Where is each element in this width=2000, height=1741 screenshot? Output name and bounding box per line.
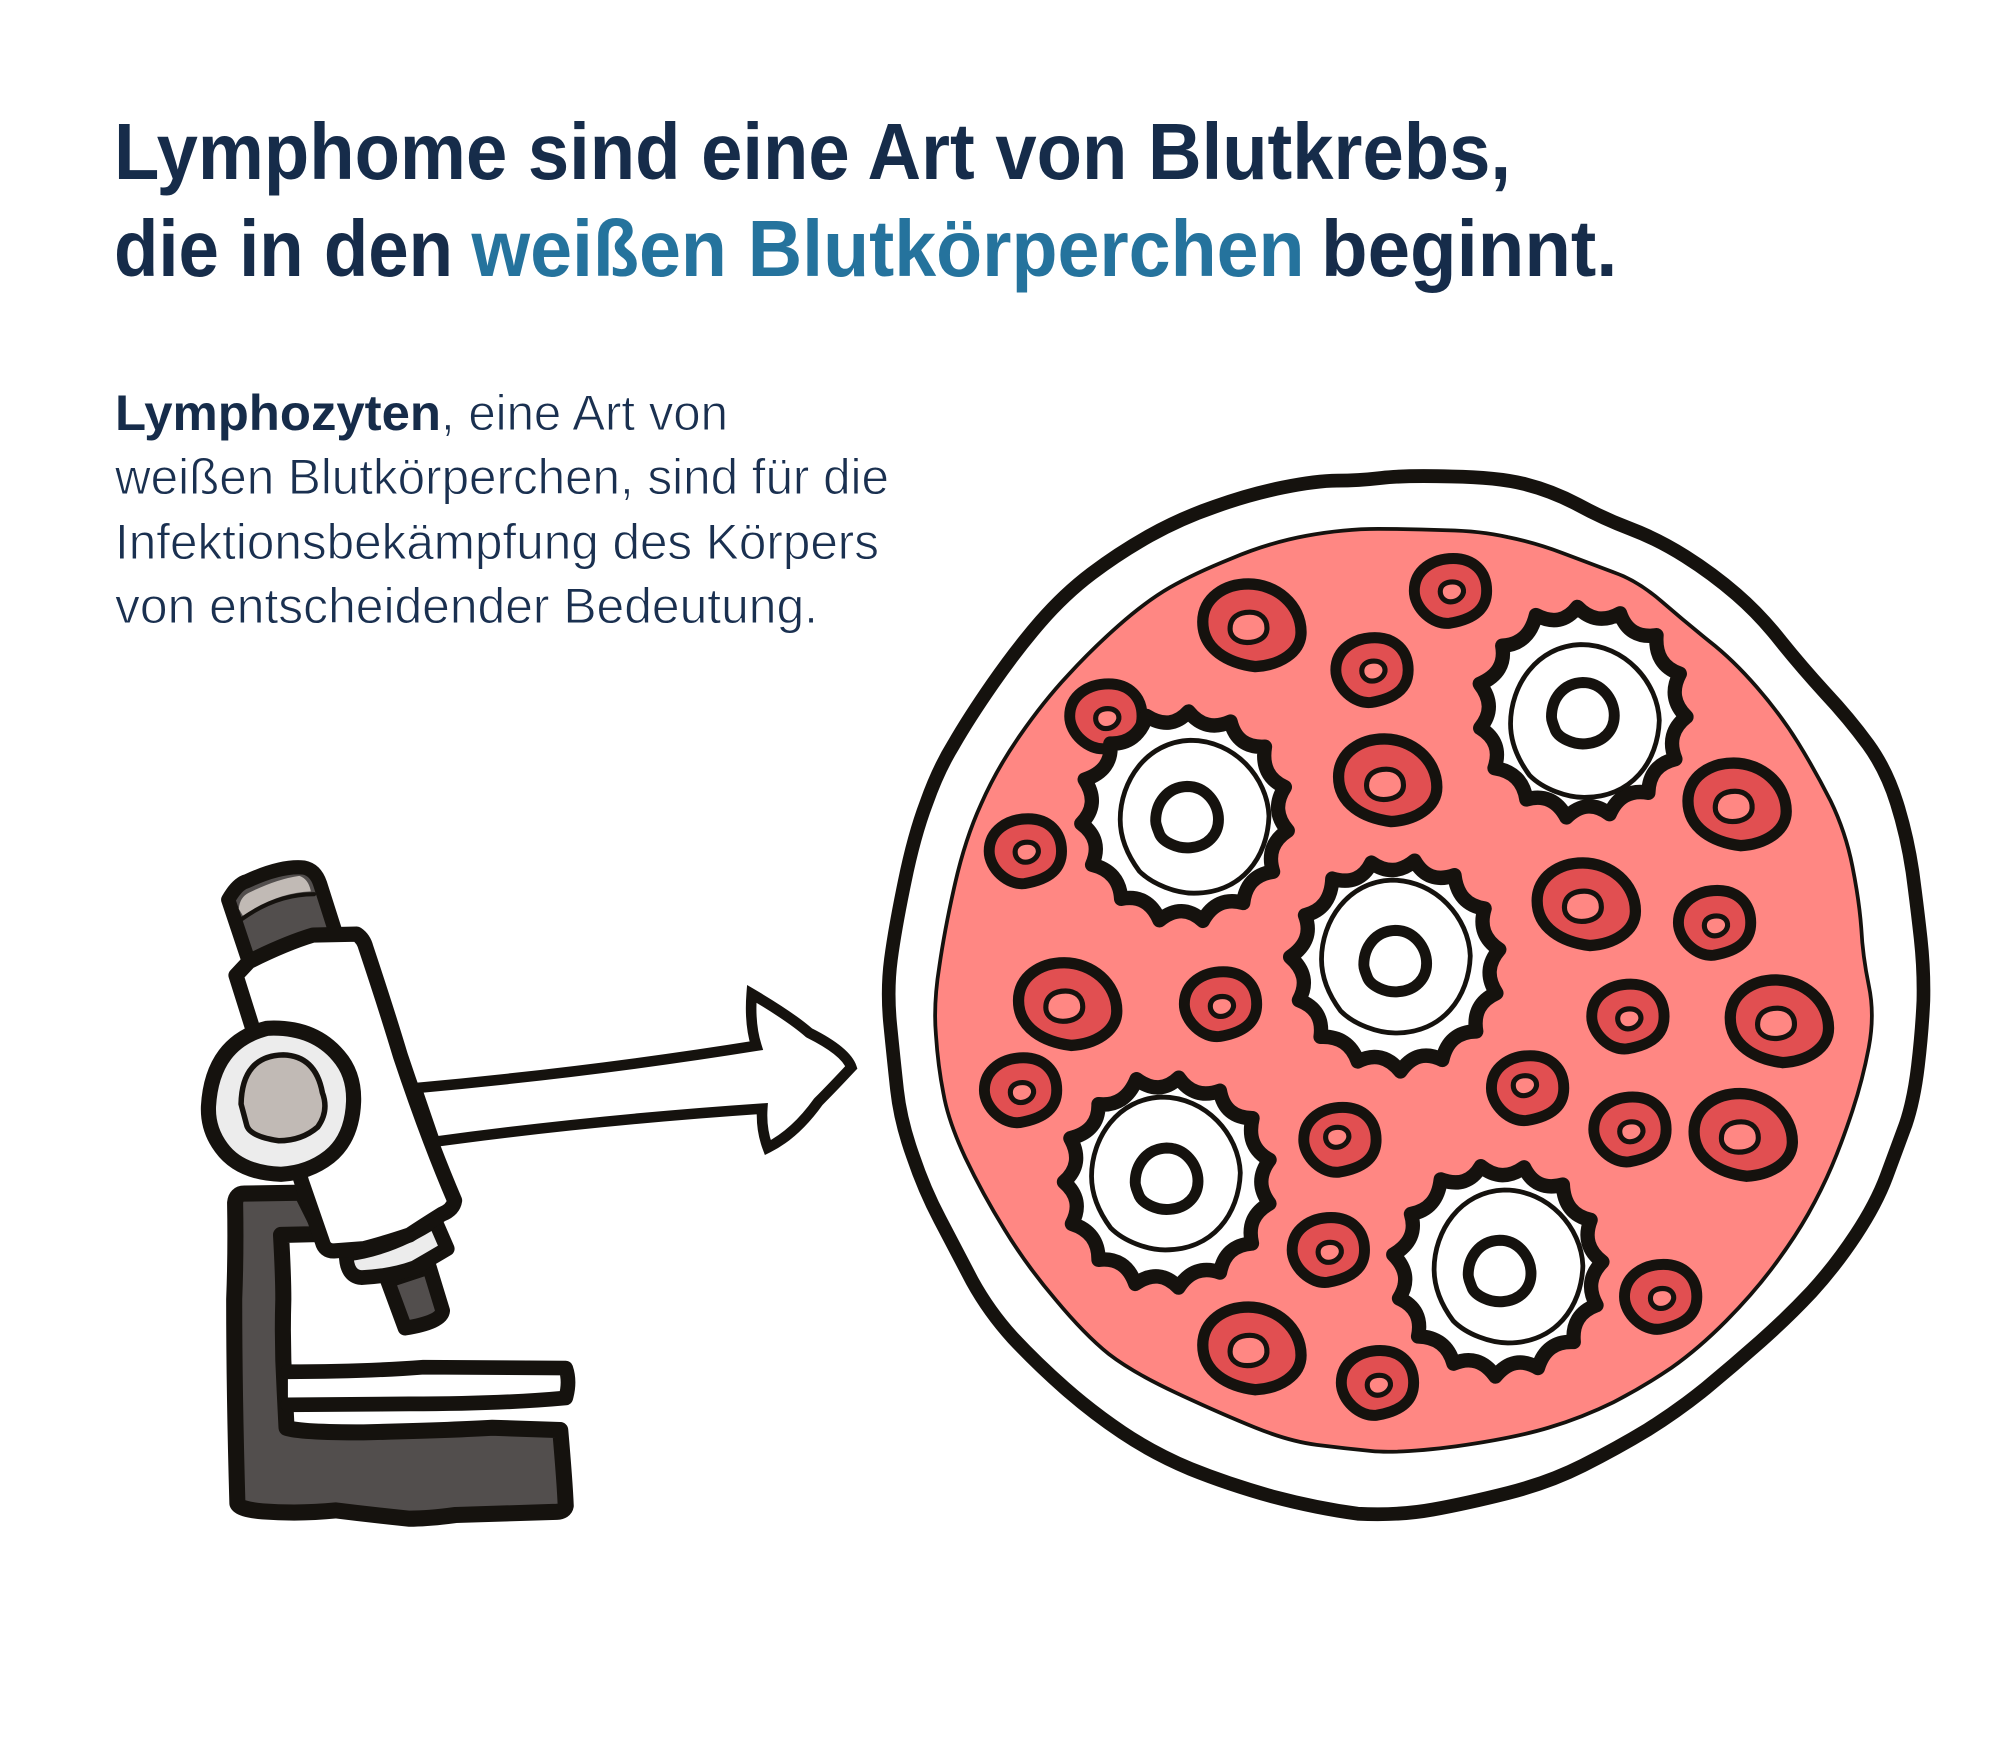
title line 1: Lymphome sind eine Art von Blutkrebs,	[114, 107, 1511, 196]
lymphocyte 3	[1279, 847, 1514, 1085]
body line 4: von entscheidender Bedeutung.	[115, 578, 818, 634]
pink plasma area	[935, 529, 1872, 1452]
title	[114, 107, 1618, 293]
body line 2: weißen Blutkörperchen, sind für die	[114, 449, 889, 505]
lymphocyte 5	[1388, 1158, 1610, 1383]
magnified blood sample circle	[889, 476, 1924, 1514]
red blood cells: small	[984, 558, 1751, 1415]
eyepiece	[228, 867, 336, 962]
lower collar	[346, 1220, 447, 1278]
microscope base	[234, 1193, 566, 1519]
body paragraph	[114, 385, 889, 634]
body line 3: Infektionsbekämpfung des Körpers	[115, 514, 879, 570]
title line 2 start: die in den	[114, 204, 453, 293]
arrow pointing to magnified view	[416, 994, 851, 1148]
microscope stage	[288, 1367, 568, 1405]
microscope with arrow	[208, 867, 851, 1519]
lymphocyte 1	[1067, 698, 1302, 936]
body line 1: , eine Art von	[441, 385, 728, 441]
lymphocyte 2	[1473, 602, 1692, 823]
title highlight: weißen Blutkörperchen: weißen Blutkörperchen	[471, 204, 1304, 293]
title line 2 end: beginnt.	[1321, 204, 1618, 293]
body bold term: Lymphozyten	[115, 385, 441, 441]
microscope tube	[236, 934, 455, 1251]
objective lens	[388, 1267, 443, 1328]
lymphocyte 4	[1044, 1058, 1291, 1308]
outer white dish	[889, 476, 1924, 1514]
red blood cells: large	[1019, 584, 1829, 1390]
focus knob	[208, 1028, 354, 1174]
